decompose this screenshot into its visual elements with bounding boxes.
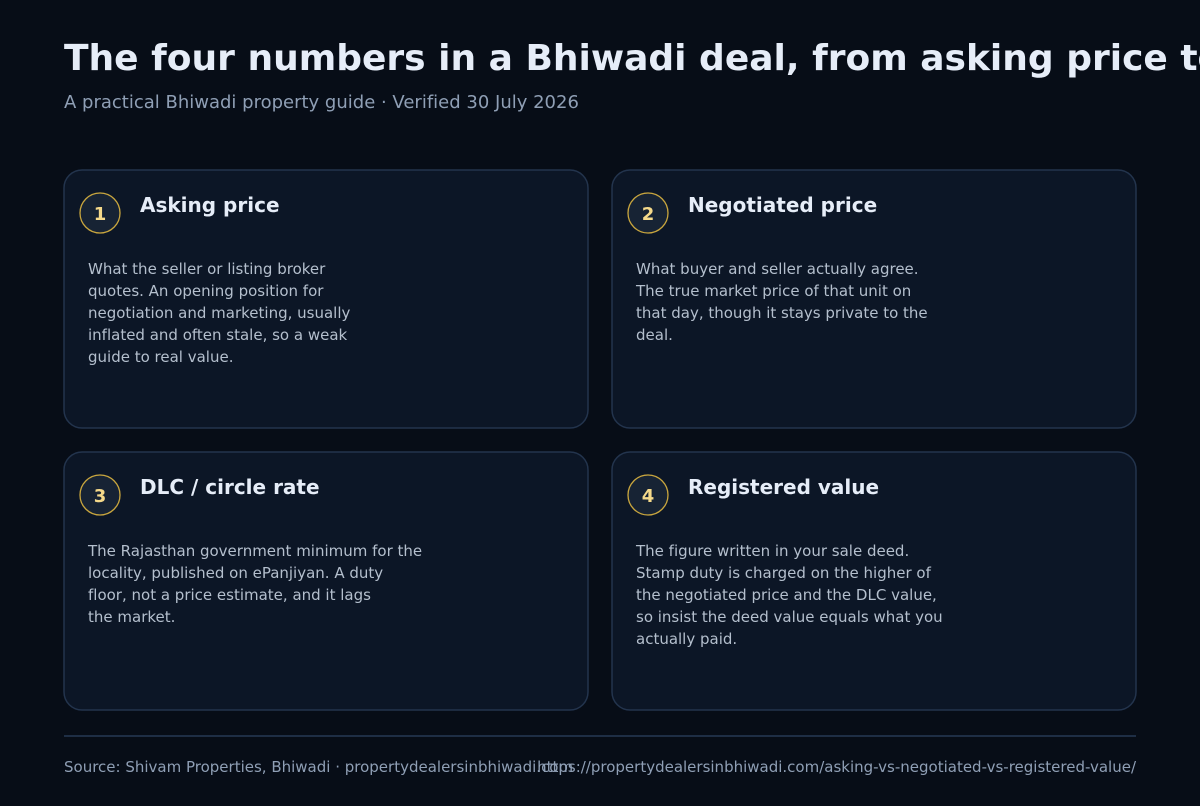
- icon: number 3: 3: [94, 486, 106, 507]
- icon: number 1: [80, 193, 120, 233]
- icon: number 4: 4: [642, 486, 654, 507]
- text block: asking price: What the seller or listing broker: [88, 260, 326, 278]
- text block: registered value: so insist the deed value equals what you: [636, 608, 943, 626]
- icon: number 2: [628, 193, 668, 233]
- text block: registered value: Stamp duty is charged on the higher of: [636, 564, 932, 582]
- text block: negotiated price: deal.: [636, 326, 673, 344]
- icon: number 3: [80, 475, 120, 515]
- footer source: Source: Shivam Properties, Bhiwadi · propertydealersinbhiwadi.com: [64, 758, 573, 776]
- text block: asking price: guide to real value.: [88, 348, 233, 366]
- heading: asking price: Asking price: [140, 193, 280, 217]
- text block: DLC / circle rate: the market.: [88, 608, 175, 626]
- footer url: https://propertydealersinbhiwadi.com/asking-vs-negotiated-vs-registered-value/: [537, 758, 1137, 776]
- heading: DLC / circle rate: DLC / circle rate: [140, 475, 320, 499]
- text block: negotiated price: The true market price of that unit on: [635, 282, 911, 300]
- text block: DLC / circle rate: locality, published on ePanjiyan. A duty: [88, 564, 383, 582]
- text block: negotiated price: What buyer and seller actually agree.: [636, 260, 919, 278]
- text block: DLC / circle rate: floor, not a price estimate, and it lags: [88, 586, 371, 604]
- icon: number 2: 2: [642, 204, 654, 225]
- heading: negotiated price: Negotiated price: [688, 193, 877, 217]
- panel: DLC / circle rate: [64, 452, 588, 710]
- panel: registered value: [612, 452, 1136, 710]
- subtitle: A practical Bhiwadi property guide · Verified 30 July 2026: [64, 92, 579, 113]
- heading: registered value: Registered value: [688, 475, 879, 499]
- text block: DLC / circle rate: The Rajasthan government minimum for the: [87, 542, 422, 560]
- text block: asking price: inflated and often stale, so a weak: [88, 326, 348, 344]
- icon: number 4: [628, 475, 668, 515]
- text block: asking price: negotiation and marketing, usually: [88, 304, 350, 322]
- text block: registered value: actually paid.: [636, 630, 737, 648]
- panel: asking price: [64, 170, 588, 428]
- icon: number 1: 1: [94, 204, 106, 225]
- text block: negotiated price: that day, though it stays private to the: [636, 304, 928, 322]
- text block: registered value: the negotiated price and the DLC value,: [636, 586, 937, 604]
- text block: registered value: The figure written in your sale deed.: [635, 542, 909, 560]
- panel: negotiated price: [612, 170, 1136, 428]
- text block: asking price: quotes. An opening position for: [88, 282, 324, 300]
